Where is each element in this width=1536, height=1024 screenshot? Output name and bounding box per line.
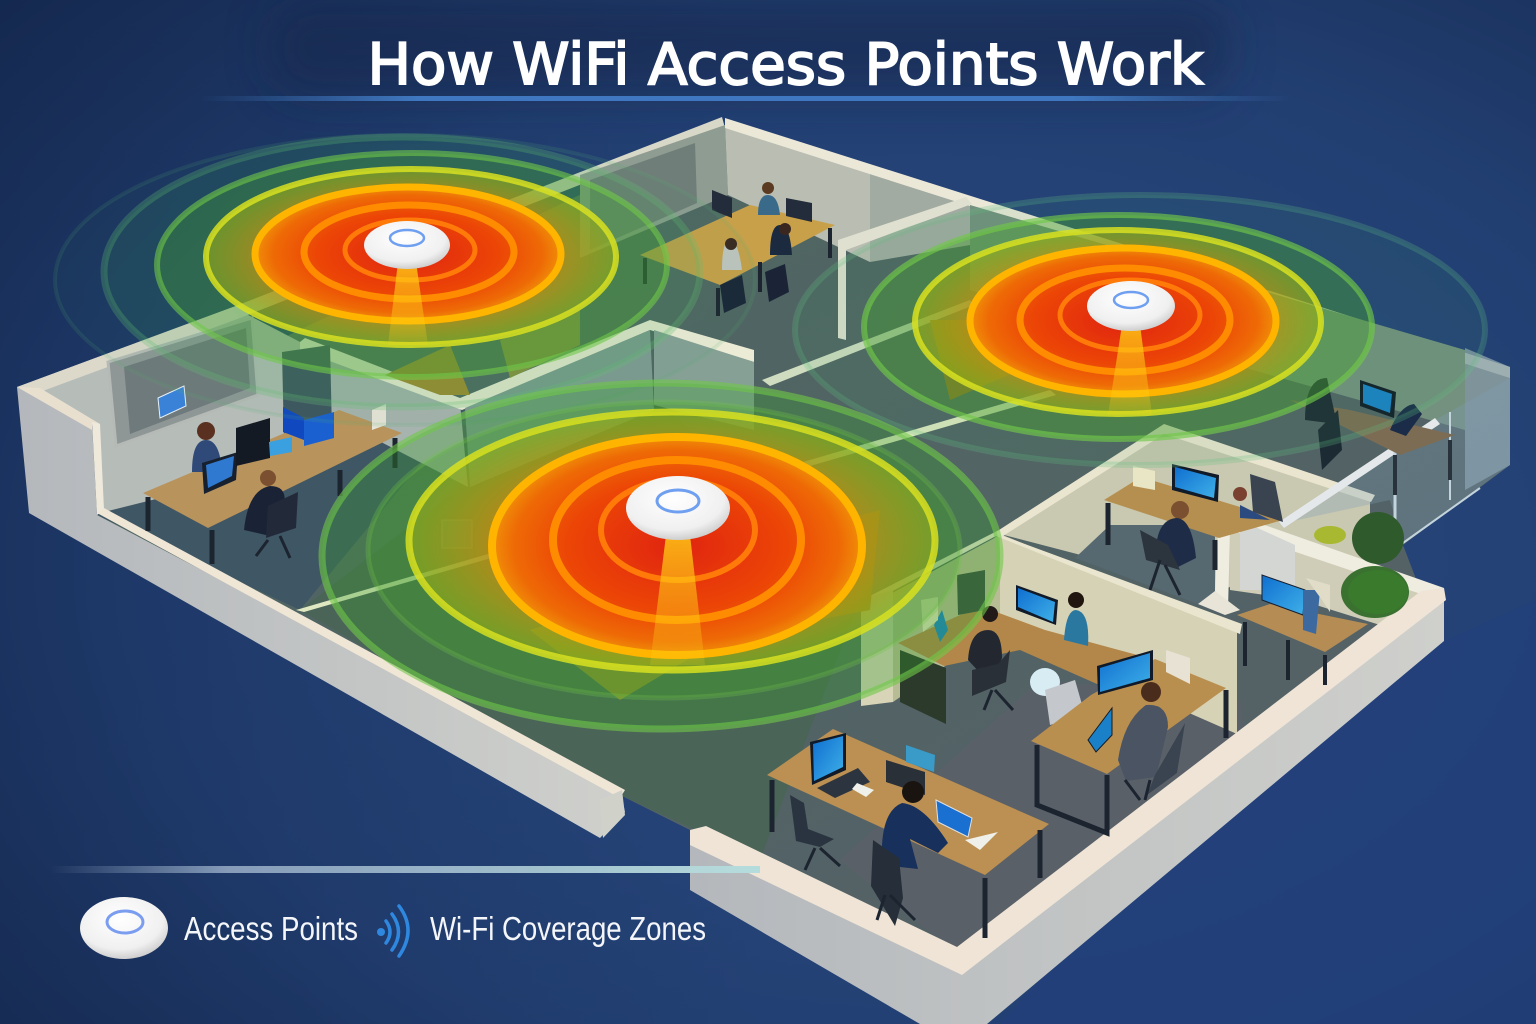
floor [92,125,1510,954]
left back wall [17,307,300,512]
whiteboard [108,318,258,446]
interior wall: V section [282,320,754,487]
workstation: upper cubicle desk [1104,464,1283,595]
access point device [364,221,450,269]
legend label: coverage zones: Wi-Fi Coverage Zones [430,910,706,947]
workstation: hidden desks beneath coverage zones [385,310,1020,700]
outer front wall [690,588,1446,1024]
workstation: top room desk [640,182,835,316]
workstation: front desk [767,729,1049,938]
access point device [626,476,730,540]
coverage zone: access point 2 [795,195,1485,465]
workstation: left room desk [143,404,402,564]
plants [1314,512,1409,618]
workstation: middle desk with man [1031,650,1226,833]
workstation: right room desk [1290,378,1455,495]
light beam [650,535,705,665]
back room walls [580,118,1510,490]
mid floor divider lines [296,300,1056,612]
outer left wall [17,387,625,838]
legend icon: access point [80,897,168,959]
glass wall [1279,378,1510,543]
title underline [200,96,1290,101]
light beam [1108,325,1152,415]
legend icon: wifi waves [377,906,408,956]
legend divider [50,866,760,873]
access point device [1087,281,1175,331]
legend [80,897,706,959]
title: How WiFi Access Points Work [368,32,1204,98]
coverage zone: access point 1 [55,135,755,425]
coverage zone: access point 3 [322,383,1000,729]
workstation: cubicle desk with woman [898,570,1141,725]
right lower room walls [861,424,1444,734]
light beam [388,262,428,345]
legend label: access points: Access Points [184,910,358,947]
workstation: small cubicle desk [1237,570,1408,685]
